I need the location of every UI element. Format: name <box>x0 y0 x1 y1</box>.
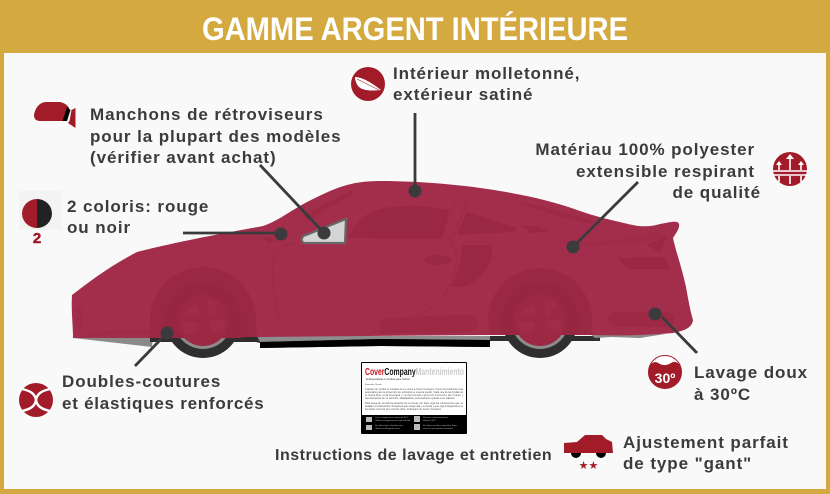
icon: fitted car with stars <box>564 435 613 472</box>
care instructions label: El Especialista en fundas para coches <box>366 377 411 381</box>
icon: stretch fabric <box>773 152 807 186</box>
rear wheel arch <box>488 268 593 335</box>
text: gentle wash: à 30ºC <box>694 385 751 404</box>
care instructions label: la Gama Blue está diseñada y confeccionada siguiendo fielmente las formas y <box>365 394 464 397</box>
front bumper vent <box>76 307 83 330</box>
front wheel arch <box>150 267 257 338</box>
side vent <box>450 245 493 287</box>
text: care instructions: Instructions de lavage et entretien <box>275 447 552 464</box>
icon: double seams <box>19 383 53 417</box>
hood shading <box>303 190 355 222</box>
rear lower panel <box>608 312 674 327</box>
spoiler shadow <box>647 235 668 253</box>
icon: feather <box>351 67 385 101</box>
text: colours: ou noir <box>67 218 131 237</box>
door handle <box>424 255 452 265</box>
care instructions label: Utilizar un programa para ropa delicada <box>375 419 411 422</box>
front wheel <box>165 282 241 358</box>
care instructions label <box>361 362 467 434</box>
icon: two colours: 2 <box>33 230 41 247</box>
icon: mirror <box>34 102 76 128</box>
text: double seams: et élastiques renforcés <box>62 394 264 413</box>
side windows <box>347 206 548 238</box>
text: fleece interior: extérieur satiné <box>393 85 533 104</box>
text: fleece interior: Intérieur molletonné, <box>393 64 580 83</box>
care instructions label: Planchar a baja temperatura <box>423 416 449 419</box>
front wheel spokes <box>165 282 241 346</box>
icon: 30 degree wash: 30º <box>655 370 675 386</box>
title: GAMME ARGENT INTÉRIEURE <box>202 11 628 47</box>
text: mirror sleeves: pour la plupart des modèles <box>90 127 342 146</box>
text: polyester material: de qualité <box>672 183 761 202</box>
front underbody <box>73 336 153 347</box>
text: gentle wash: Lavage doux <box>694 363 808 382</box>
text: glove fit: Ajustement parfait <box>623 433 789 452</box>
text: colours: 2 coloris: rouge <box>67 197 209 216</box>
rear wheel spokes <box>502 282 578 346</box>
icon: fitted car with stars: ★★ <box>579 460 598 472</box>
icon: two colours <box>19 191 62 247</box>
care instructions label: características de su vehículo, adaptándose perfectamente gracias a su elástico. <box>365 397 455 400</box>
callout lines and dots <box>135 113 697 366</box>
care instructions label: Lavar a temperatura máxima de 30°C <box>375 416 409 419</box>
care instructions label: Máximo 110°C <box>423 420 437 422</box>
mirror shadow <box>261 236 277 243</box>
text: polyester material: Matériau 100% polyester <box>535 140 755 159</box>
care instructions label: detallan a continuación. Deseamos que tenga más y su funda y que siga protegiendo a su <box>365 405 464 408</box>
care instructions label: Para asegurar la máxima duración de su funda, por favor siga las instrucciones que se <box>365 402 464 405</box>
rear wheel <box>502 282 578 358</box>
text: glove fit: de type "gant" <box>623 454 752 473</box>
icon: 30 degree wash <box>648 356 682 389</box>
door outline <box>273 238 457 322</box>
care instructions label: preciado vehículo por muchos años. El Equipo de Cover Company <box>365 408 442 411</box>
care instructions label: secar en una superficie horizontal <box>423 427 453 430</box>
care instructions label: Gracias por confiar el cuidado de su coche a Cover Company. Crear los productos más <box>365 388 464 391</box>
tail vent <box>617 257 670 269</box>
car cover body <box>72 181 693 338</box>
text: polyester material: extensible respirant <box>576 162 755 181</box>
mirror window highlight <box>302 219 346 243</box>
text: mirror sleeves: Manchons de rétroviseurs <box>90 105 324 124</box>
covered car illustration <box>72 181 693 358</box>
care instructions label: CoverCompanyMantenimiento <box>365 367 464 378</box>
care instructions label: avanzados para la protección de vehículos es nuestra pasión. Cada una de las fundas de <box>365 391 464 394</box>
care instructions label: No utilizar secadora automática. Dejar <box>423 424 457 427</box>
sill <box>150 336 600 348</box>
care instructions label: No utilizar lejía ni desinfectante <box>375 424 404 427</box>
rear deck creases <box>513 201 605 225</box>
side sill bulge <box>380 315 479 334</box>
pillar lines <box>347 197 469 238</box>
text: mirror sleeves: (vérifier avant achat) <box>90 148 277 167</box>
care instructions label: Utilizar un detergente suave <box>375 427 401 430</box>
care instructions label: Estimado Cliente, <box>365 383 383 386</box>
rear underbody <box>590 334 665 338</box>
text: double seams: Doubles-coutures <box>62 372 221 391</box>
